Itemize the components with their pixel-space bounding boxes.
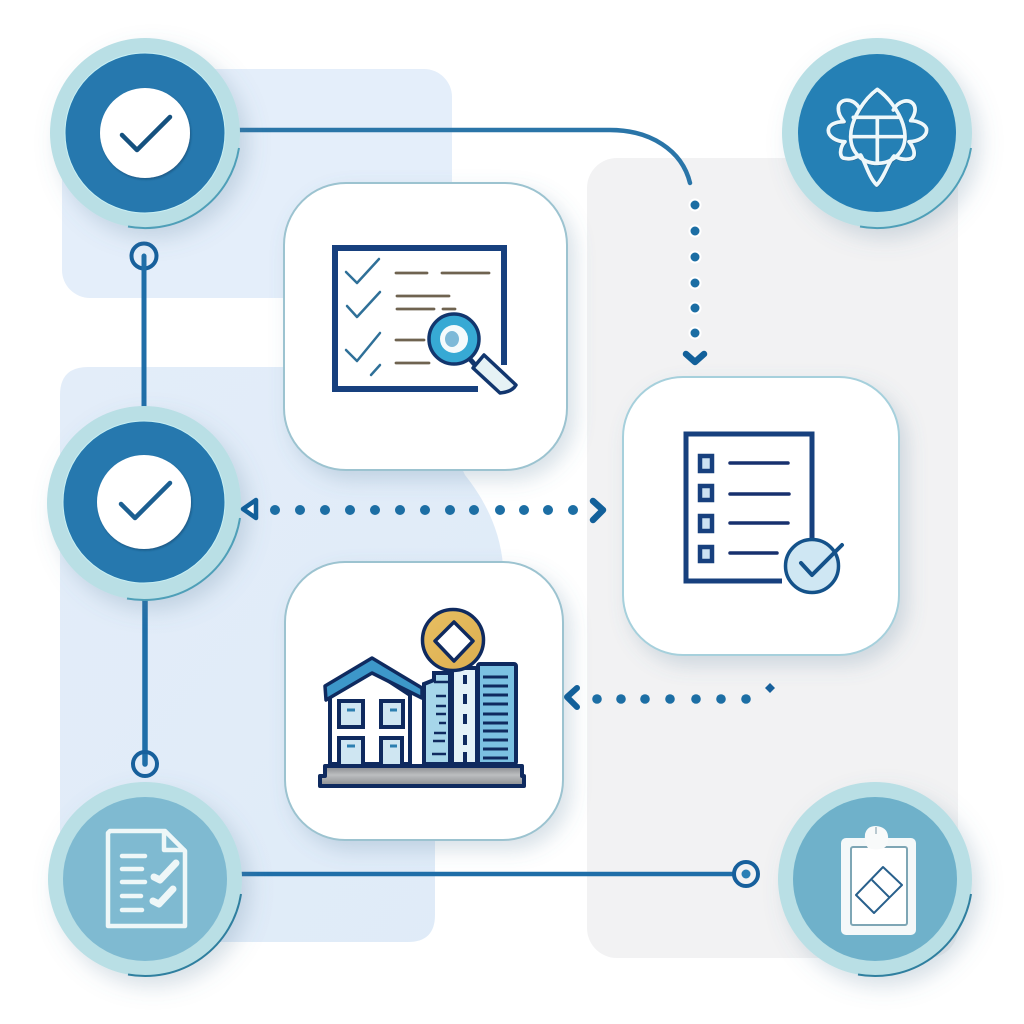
icon: checklist document [335, 248, 504, 389]
panel: right grey background [587, 158, 958, 958]
connector: lower dotted arrow [567, 683, 775, 707]
icon: check in white disc [100, 88, 190, 178]
circle: bottom-left document [48, 782, 242, 976]
card: house and buildings [285, 562, 563, 840]
card: checklist with magnifier [284, 183, 567, 470]
panel: top-left background [62, 69, 452, 298]
connector: middle dotted double arrow [243, 500, 603, 520]
icon: document with checks [108, 831, 185, 926]
icon: check in white disc [97, 455, 191, 549]
icon: list document [686, 434, 812, 581]
icon: city towers [424, 664, 516, 764]
connector: top line to dotted drop [238, 130, 704, 362]
connector: bottom horizontal [240, 862, 758, 886]
icon: magnifying glass [429, 314, 516, 393]
connector: lower left vertical [133, 597, 157, 776]
icon: house [325, 658, 422, 764]
icon: globe with petals [828, 89, 927, 185]
connector: upper left vertical [132, 244, 156, 408]
icon: check badge [786, 540, 842, 592]
card: checklist with check badge [623, 377, 899, 655]
icon: coin with diamond [422, 610, 484, 670]
circle: middle-left check [47, 406, 241, 600]
icon: clipboard with diamond [841, 826, 916, 935]
circle: top-right globe [782, 38, 972, 228]
circle: bottom-right clipboard [778, 782, 972, 976]
panel: mid-left background [60, 367, 503, 942]
circle: top-left check [50, 38, 240, 228]
icon: ground slab [320, 766, 524, 786]
